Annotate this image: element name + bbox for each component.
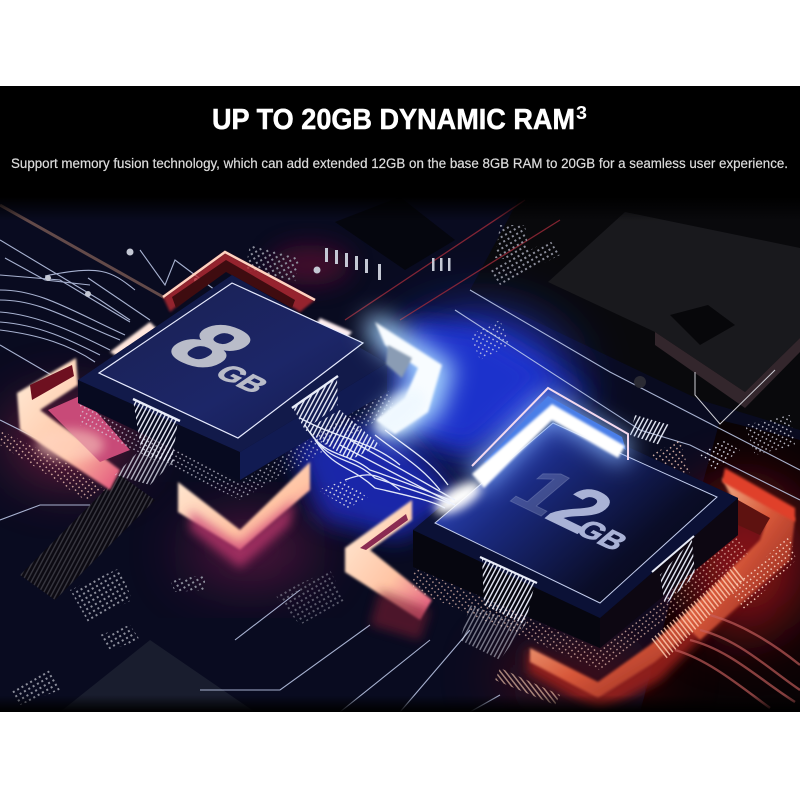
red ambient glow right [685, 485, 800, 635]
chip left side [78, 380, 240, 480]
dark upper right zone [470, 197, 800, 430]
white dotted cluster between chips [318, 480, 368, 508]
wire bonds left of 12GB chip [460, 557, 537, 660]
bright trace bundle between chips [300, 418, 455, 508]
magenta ambient glow lower chip 1 [185, 524, 315, 576]
grey memory block upper right [548, 212, 800, 424]
chip label 8: 8 [144, 310, 278, 383]
wire bonds left of 8GB chip [115, 399, 180, 485]
glow pad: 8GB upper left light [110, 322, 158, 358]
chip right side [240, 363, 387, 480]
blue inner glow [400, 320, 600, 450]
chip left side [413, 530, 600, 648]
deep blue trace glow [290, 420, 460, 540]
8GB chip [78, 275, 387, 480]
white circuit traces [0, 240, 800, 712]
title: UP TO 20GB DYNAMIC RAM [212, 104, 575, 136]
description: Support memory fusion technology, which can add extended 12GB on the base 8GB RAM to 20GB for a seamless user experience. [11, 156, 788, 171]
glow bracket: right of 8GB chip, white-blue [362, 315, 455, 445]
chip top face [78, 275, 387, 452]
glow pad: 8GB upper right light [315, 318, 352, 340]
blue-white flare spot [430, 475, 486, 521]
navy left board area [0, 197, 800, 712]
12GB chip [413, 412, 738, 648]
chip label GB: GB [569, 515, 634, 556]
chip label surface [99, 283, 363, 438]
red accent traces upper [345, 200, 560, 320]
glow bracket: left of 12GB chip [345, 500, 432, 640]
red ambient glow left [10, 402, 130, 478]
wire bonds right of 8GB chip [292, 376, 380, 460]
pad dots near board top [45, 248, 646, 388]
board base [0, 197, 800, 712]
top fade to banner [0, 197, 800, 221]
red streak traces lower right [675, 615, 800, 708]
dotted pads below 12GB chip [413, 535, 748, 670]
chip label surface [435, 423, 717, 603]
title superscript: 3 [576, 103, 587, 123]
dark lower right zone [640, 420, 800, 712]
chip body [413, 412, 738, 648]
glow bracket: bottom of 8GB chip [178, 462, 310, 568]
chip right side [600, 498, 738, 648]
blue ambient glow [395, 320, 565, 450]
glow bracket: top of 8GB chip [163, 252, 315, 312]
chip body [78, 275, 387, 449]
flare beside right bracket [367, 380, 433, 444]
black ribbon bus lower left [20, 475, 155, 600]
red ambient glow bottom [495, 650, 665, 700]
glow bracket: bottom of 12GB chip [522, 590, 738, 710]
fine comb along 12GB bottom [495, 668, 560, 705]
chip label 12: 12 [494, 456, 631, 545]
chip top face [413, 412, 738, 618]
glow bracket: left of 8GB chip [17, 358, 130, 490]
fine comb under 12GB chip lower right [650, 565, 745, 660]
dotted pad clusters [0, 225, 795, 705]
black banner panel [0, 86, 800, 712]
upper board component [336, 208, 454, 270]
diagonal power trace [0, 205, 165, 298]
bottom left grey block [70, 640, 243, 704]
wire bonds right of 12GB chip [652, 536, 695, 605]
chip label GB: GB [207, 360, 275, 398]
circuit board illustration [0, 197, 800, 712]
glow bracket: right of 12GB chip [680, 468, 796, 640]
bottom fade [0, 695, 800, 712]
crimson glow behind top bracket [270, 245, 350, 285]
glow bracket: top of 12GB chip, white-blue [468, 388, 632, 490]
dotted pads below 8GB chip [80, 390, 395, 500]
